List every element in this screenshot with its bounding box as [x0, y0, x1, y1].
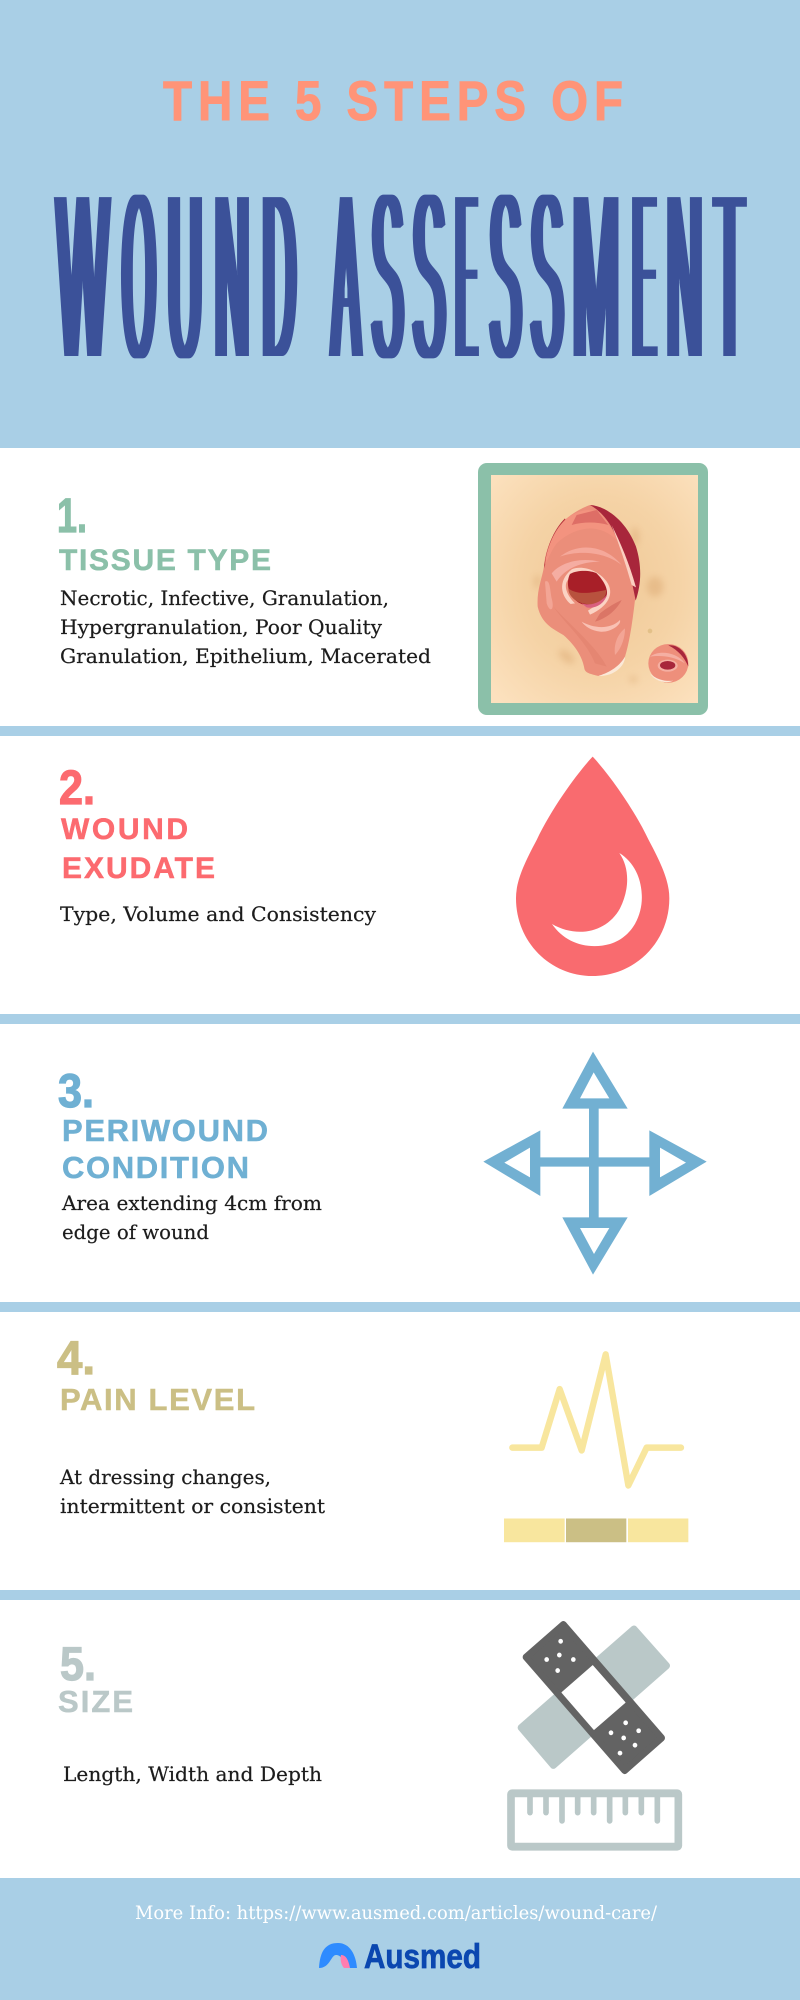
divider 1: [0, 726, 800, 736]
title: T: [715, 141, 744, 413]
panel: tissue type: [57, 463, 708, 715]
panel: size: [58, 1624, 678, 1847]
step number 2: 2.: [59, 762, 95, 815]
icon: bandage and ruler: [511, 1624, 678, 1847]
icon: four-way arrows: [483, 1052, 707, 1275]
panel: wound exudate: [59, 757, 669, 976]
title: O: [123, 141, 155, 413]
title: S: [413, 141, 445, 413]
title: S: [490, 141, 521, 413]
image: wound in green frame: [478, 463, 708, 715]
heading: periwound condition: CONDITION: [62, 1150, 249, 1185]
text: tissue types: Necrotic, Infective, Granulation,: [60, 586, 389, 610]
text: periwound: Area extending 4cm from: [61, 1191, 322, 1215]
title: M: [573, 141, 619, 413]
title: U: [168, 141, 202, 413]
logo: Ausmed: [319, 1938, 481, 1976]
small wound: [648, 644, 688, 683]
divider 4: [0, 1590, 800, 1600]
panel: periwound condition: [58, 1052, 707, 1275]
step number 3: 3.: [58, 1064, 94, 1117]
header panel: [0, 0, 800, 448]
step number 5: 5.: [60, 1637, 96, 1690]
logo: Ausmed: Ausmed: [364, 1938, 481, 1976]
heading: wound exudate: WOUND: [61, 813, 188, 846]
title: S: [372, 141, 403, 413]
subtitle: THE 5 STEPS OF: [163, 69, 629, 132]
divider 2: [0, 1014, 800, 1024]
heading: pain level: PAIN LEVEL: [60, 1382, 255, 1417]
title: [57, 141, 744, 413]
title: E: [457, 141, 476, 413]
title: N: [667, 141, 702, 413]
title: W: [57, 141, 108, 413]
title: A: [332, 141, 360, 413]
heading: periwound condition: PERIWOUND: [62, 1113, 268, 1148]
text: tissue types: Granulation, Epithelium, Macerated: [60, 644, 431, 668]
footer link text: More Info: https://www.ausmed.com/articles/wound-care/: [135, 1903, 658, 1924]
wound centre: [562, 568, 610, 615]
title: S: [531, 141, 563, 413]
text: tissue types: Hypergranulation, Poor Quality: [60, 615, 383, 639]
title: E: [633, 141, 655, 413]
icon: blood drop: [516, 757, 669, 976]
heading: tissue type: TISSUE TYPE: [59, 544, 271, 577]
text: size: Length, Width and Depth: [63, 1762, 322, 1786]
heading: wound exudate: EXUDATE: [62, 852, 215, 885]
icon: pain pulse line and scale: [504, 1354, 688, 1542]
main wound: [538, 505, 640, 676]
title: D: [263, 141, 296, 413]
text: pain: At dressing changes,: [59, 1465, 271, 1489]
footer panel: [0, 1878, 800, 2000]
panel: pain level: [57, 1331, 688, 1542]
text: pain: intermittent or consistent: [60, 1494, 325, 1518]
title: N: [215, 141, 249, 413]
text: exudate: Type, Volume and Consistency: [60, 902, 377, 926]
text: periwound: edge of wound: [62, 1220, 209, 1244]
step number 4: 4.: [57, 1331, 95, 1384]
heading: size: SIZE: [58, 1684, 133, 1719]
divider 3: [0, 1302, 800, 1312]
step number 1: 1.: [57, 490, 87, 543]
